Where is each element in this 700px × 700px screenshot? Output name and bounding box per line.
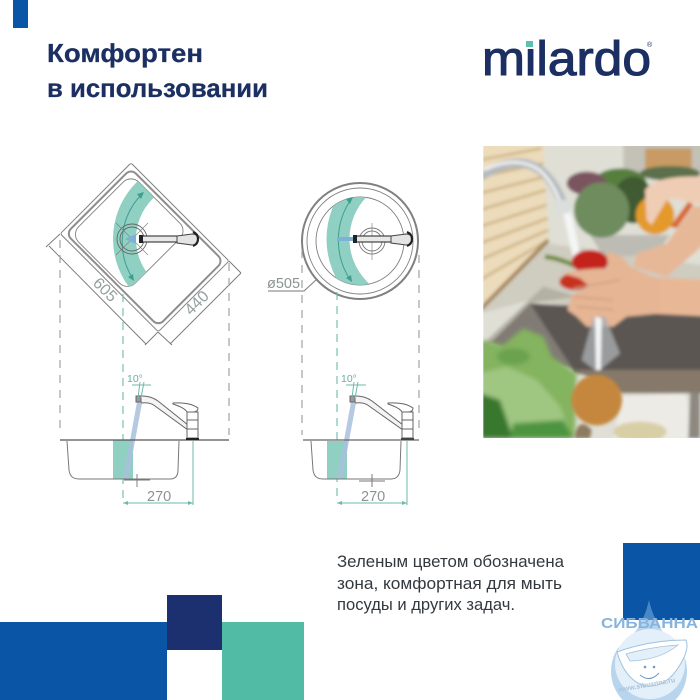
decorative block composition: bottom left bbox=[0, 595, 304, 700]
water beam bbox=[123, 402, 142, 479]
green zone bbox=[327, 441, 347, 479]
dimension 440 bbox=[158, 261, 241, 345]
dimension 270: 270 bbox=[147, 489, 171, 505]
logo: milardo: ® bbox=[647, 41, 653, 49]
diagram: square sink top view bbox=[46, 163, 262, 345]
title bbox=[47, 38, 268, 103]
10 degree label bbox=[127, 373, 151, 398]
title: в использовании bbox=[47, 73, 268, 103]
watermark: sibvanna: СИБВАННА bbox=[601, 615, 698, 632]
bowl and vegetables bbox=[590, 235, 670, 257]
faucet side bbox=[136, 396, 199, 439]
dimension 605 bbox=[46, 234, 158, 345]
body text: зона, комфортная для мыть bbox=[337, 575, 562, 593]
lettuce bbox=[480, 328, 577, 438]
dimension 605: 605 bbox=[89, 275, 120, 306]
diagram: round sink top view bbox=[267, 182, 419, 300]
onion bbox=[571, 375, 622, 425]
swing arc arrows bbox=[122, 192, 144, 281]
corner accent square bbox=[13, 0, 28, 28]
green comfort zone bbox=[113, 181, 154, 286]
washing hand bbox=[563, 252, 660, 327]
watermark: sibvanna bbox=[601, 600, 698, 700]
dimension diameter 505 bbox=[267, 276, 316, 292]
diagram: round sink side view bbox=[303, 373, 419, 505]
dimension diameter 505: ø505 bbox=[267, 276, 300, 292]
10 degree label: 10° bbox=[127, 373, 143, 385]
faucet base and spout bbox=[116, 223, 198, 255]
swing arc arrows bbox=[338, 197, 353, 282]
water beam bbox=[337, 402, 356, 479]
body text: Зеленым цветом обозначена bbox=[337, 553, 564, 571]
dimension 270 bbox=[123, 441, 193, 505]
faucet bbox=[480, 163, 564, 207]
dimension 270: 270 bbox=[361, 489, 385, 505]
photo: washing a pepper under the faucet bbox=[480, 140, 700, 442]
green zone bbox=[113, 440, 133, 479]
blinds bbox=[480, 140, 548, 307]
pepper bbox=[545, 257, 577, 267]
title: Комфортен bbox=[47, 38, 203, 68]
counter bbox=[484, 243, 700, 312]
dimension 440: 440 bbox=[182, 288, 213, 319]
logo: milardo: milardo bbox=[482, 33, 651, 86]
upper hand and arm bbox=[645, 176, 700, 225]
decorative block: bottom right bbox=[623, 543, 700, 620]
sink profile bbox=[311, 441, 401, 487]
body text bbox=[337, 553, 564, 614]
faucet base and spout bbox=[337, 223, 412, 260]
sink profile bbox=[67, 441, 179, 479]
10 degree label: 10° bbox=[341, 373, 357, 385]
faucet side bbox=[350, 396, 414, 439]
dish bbox=[613, 393, 689, 438]
lower arm bbox=[656, 276, 700, 319]
projection guide lines bbox=[60, 240, 419, 500]
splash bbox=[582, 317, 620, 370]
green comfort zone bbox=[326, 197, 370, 285]
body text: посуды и других задач. bbox=[337, 596, 515, 614]
diagram: square sink side view bbox=[60, 373, 229, 505]
watermark: sibvanna: www.sibvanna.ru bbox=[617, 677, 676, 694]
water stream bbox=[563, 210, 581, 260]
